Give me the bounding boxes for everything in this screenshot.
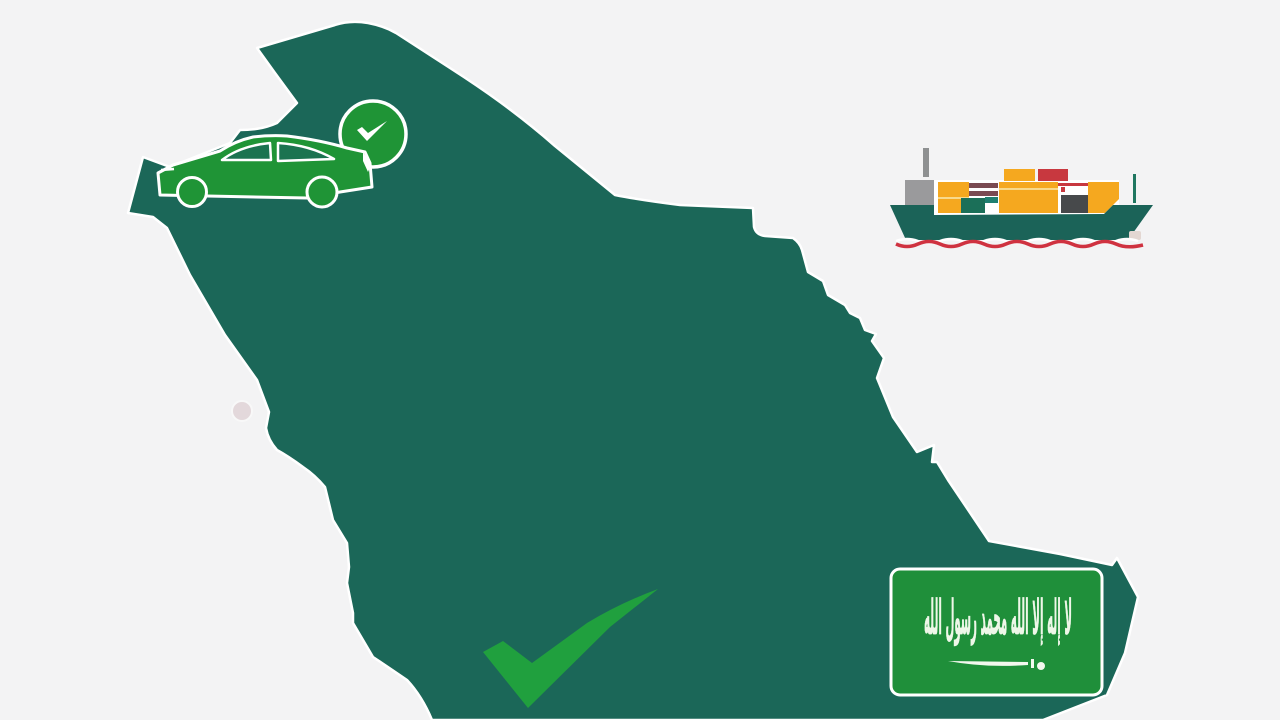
flag sword	[948, 661, 1028, 666]
large check mark	[483, 589, 658, 708]
panel: Saudi flag	[891, 569, 1102, 695]
small location dot	[232, 401, 252, 421]
ship mast	[1133, 174, 1136, 203]
map of Saudi Arabia	[128, 22, 1138, 720]
cargo bay backing	[934, 180, 1119, 216]
icon: car	[158, 136, 372, 207]
water crest	[896, 239, 1138, 243]
hull badge	[1129, 231, 1141, 240]
ship funnel	[923, 148, 929, 177]
icon: container ship	[890, 148, 1153, 247]
icon: check badge	[340, 101, 406, 167]
ship hull	[890, 205, 1153, 240]
water wave	[896, 242, 1143, 247]
containers	[938, 182, 969, 213]
